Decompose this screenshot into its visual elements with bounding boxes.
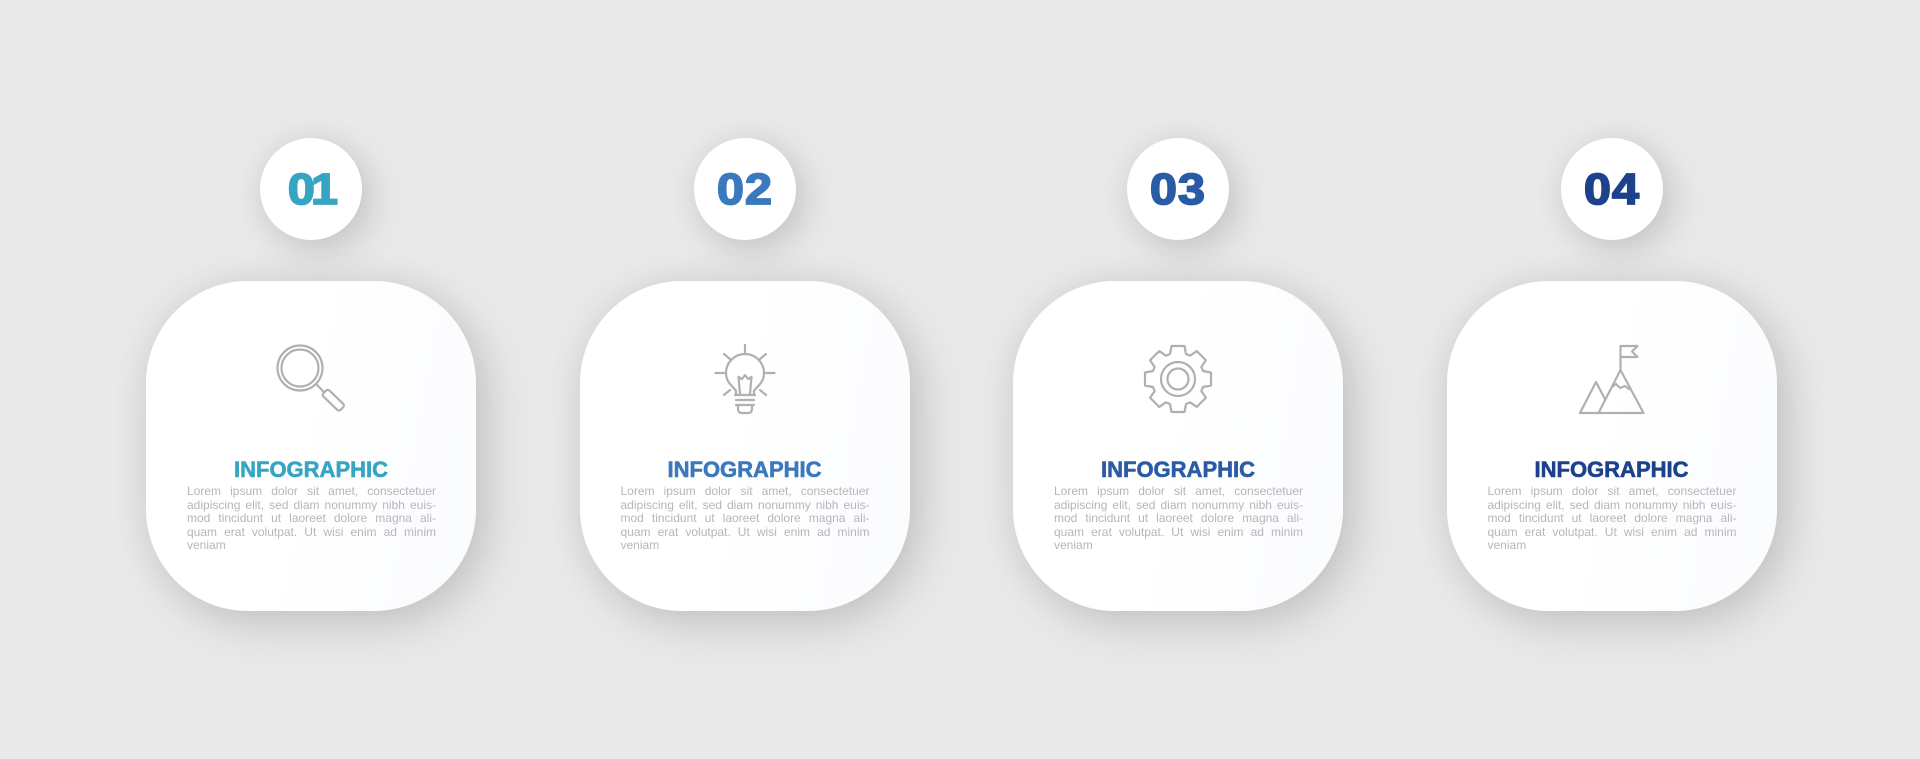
body text <box>187 484 436 552</box>
number badge 02: 02 <box>716 165 773 214</box>
card 2 <box>580 281 910 611</box>
body text <box>1054 484 1303 552</box>
number badge 04 <box>1560 138 1662 240</box>
panel: step 4 <box>1434 133 1806 640</box>
body text: Lorem ipsum dolor sit amet, consectetuer <box>1488 484 1736 498</box>
number badge 03 <box>1127 138 1229 240</box>
number badge 01 <box>260 138 362 240</box>
body text <box>1488 484 1736 552</box>
body text: mod tincidunt ut laoreet dolore magna ali- <box>1054 511 1303 525</box>
body text <box>620 484 870 552</box>
icon: gear <box>1144 344 1212 414</box>
panel: step 1 <box>134 133 505 640</box>
card 4 <box>1446 281 1776 611</box>
heading: INFOGRAPHIC <box>1534 457 1688 482</box>
body text: Lorem ipsum dolor sit amet, consectetuer <box>1054 484 1303 498</box>
body text: veniam <box>620 538 659 552</box>
heading: INFOGRAPHIC <box>668 457 822 482</box>
body text: Lorem ipsum dolor sit amet, consectetuer <box>620 484 870 498</box>
body text: veniam <box>1054 538 1093 552</box>
card 1 <box>146 281 476 611</box>
body text: adipiscing elit, sed diam nonummy nibh euis- <box>620 498 870 512</box>
body text: quam erat volutpat. Ut wisi enim ad minim <box>1488 524 1736 538</box>
icon: light bulb <box>714 344 776 414</box>
number badge 03: 03 <box>1150 165 1206 214</box>
icon: mountain with flag <box>1578 344 1645 414</box>
body text: adipiscing elit, sed diam nonummy nibh euis- <box>1054 498 1303 512</box>
body text: quam erat volutpat. Ut wisi enim ad minim <box>187 524 436 538</box>
number badge 02 <box>694 138 796 240</box>
body text: mod tincidunt ut laoreet dolore magna ali- <box>1488 511 1736 525</box>
card 3 <box>1013 281 1343 611</box>
heading: INFOGRAPHIC <box>1101 457 1255 482</box>
body text: mod tincidunt ut laoreet dolore magna ali- <box>620 511 870 525</box>
heading: INFOGRAPHIC <box>234 457 388 482</box>
body text: Lorem ipsum dolor sit amet, consectetuer <box>187 484 436 498</box>
body text: adipiscing elit, sed diam nonummy nibh euis- <box>187 498 436 512</box>
panel: step 2 <box>568 133 939 640</box>
body text: mod tincidunt ut laoreet dolore magna ali- <box>187 511 436 525</box>
panel: step 3 <box>1000 133 1372 640</box>
body text: quam erat volutpat. Ut wisi enim ad minim <box>1054 524 1303 538</box>
body text: quam erat volutpat. Ut wisi enim ad minim <box>620 524 870 538</box>
body text: veniam <box>187 538 226 552</box>
body text: veniam <box>1488 538 1526 552</box>
icon: magnifying glass <box>276 344 345 412</box>
number badge 01: 01 <box>288 165 334 214</box>
body text: adipiscing elit, sed diam nonummy nibh euis- <box>1488 498 1736 512</box>
number badge 04: 04 <box>1583 165 1640 214</box>
